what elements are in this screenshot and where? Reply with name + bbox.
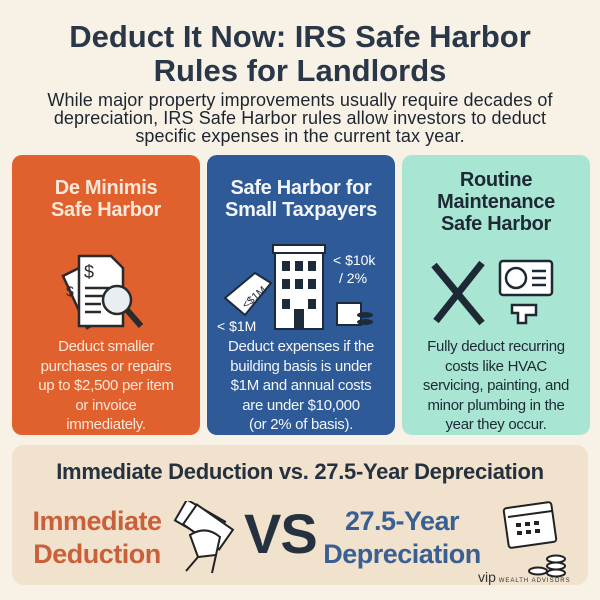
icon: documents with magnifier: $ bbox=[66, 283, 74, 299]
title: Deduct It Now: IRS Safe Harbor bbox=[69, 19, 531, 54]
text: routine maintenance: Fully deduct recurring bbox=[427, 338, 565, 355]
icon: documents with magnifier bbox=[61, 254, 144, 330]
label: immediate deduction: Deduction bbox=[33, 539, 161, 569]
icon: building with tag: <$1M bbox=[240, 284, 269, 311]
text: small taxpayers: are under $10,000 bbox=[242, 396, 360, 414]
text: de minimis bbox=[38, 338, 174, 433]
heading: small taxpayers: Safe Harbor for bbox=[230, 177, 372, 199]
text: de minimis: Deduct smaller bbox=[58, 338, 154, 355]
text: small taxpayers: Deduct expenses if the bbox=[228, 338, 374, 355]
heading: routine maintenance: Maintenance bbox=[437, 191, 555, 213]
panel: de minimis bbox=[12, 155, 200, 435]
heading: routine maintenance: Safe Harbor bbox=[441, 213, 551, 235]
text: small taxpayers: building basis is under bbox=[230, 358, 372, 374]
text: de minimis: purchases or repairs bbox=[41, 358, 171, 374]
icon: tools and HVAC bbox=[431, 260, 554, 326]
icon: building with tag bbox=[217, 244, 376, 334]
heading: small taxpayers: Small Taxpayers bbox=[225, 199, 377, 221]
text: routine maintenance: year they occur. bbox=[445, 416, 547, 433]
panel: routine maintenance bbox=[402, 155, 590, 435]
title: Rules for Landlords bbox=[154, 53, 446, 88]
icon: building with tag: < $10k bbox=[333, 252, 376, 268]
heading: de minimis: De Minimis bbox=[55, 177, 157, 199]
text: routine maintenance: servicing, painting, and bbox=[423, 377, 569, 394]
panel: small taxpayers bbox=[207, 155, 395, 435]
panel: comparison bbox=[12, 445, 588, 585]
subtitle: While major property improvements usually require decades of bbox=[47, 90, 553, 110]
icon: calendar with coins bbox=[502, 501, 566, 578]
subtitle: specific expenses in the current tax year. bbox=[135, 126, 465, 146]
label: immediate deduction bbox=[32, 506, 162, 569]
logo: VIP wealth advisors: vip WEALTH ADVISORS bbox=[478, 569, 571, 585]
text: de minimis: up to $2,500 per item bbox=[38, 377, 174, 394]
label: depreciation bbox=[323, 506, 481, 569]
text: VS: VS bbox=[244, 502, 317, 565]
heading: routine maintenance bbox=[437, 169, 555, 235]
heading: small taxpayers bbox=[225, 177, 377, 221]
heading: de minimis: Safe Harbor bbox=[51, 199, 161, 221]
text: small taxpayers: (or 2% of basis). bbox=[249, 416, 353, 433]
text: routine maintenance: costs like HVAC bbox=[445, 358, 547, 374]
label: depreciation: 27.5-Year bbox=[345, 506, 459, 536]
heading: comparison: Immediate Deduction vs. 27.5-Year Depreciation bbox=[56, 459, 544, 484]
heading: routine maintenance: Routine bbox=[460, 169, 532, 191]
icon: building with tag: < $1M bbox=[217, 318, 256, 334]
icon: hand with cash bbox=[174, 501, 234, 574]
text: routine maintenance bbox=[423, 338, 569, 433]
text: small taxpayers: $1M and annual costs bbox=[231, 377, 371, 394]
title bbox=[69, 19, 531, 88]
text: small taxpayers bbox=[228, 338, 374, 433]
text: de minimis: or invoice bbox=[75, 396, 137, 414]
icon: documents with magnifier: $ bbox=[84, 262, 94, 282]
label: immediate deduction: Immediate bbox=[32, 506, 162, 536]
label: depreciation: Depreciation bbox=[323, 539, 481, 569]
text: de minimis: immediately. bbox=[66, 416, 146, 433]
text: routine maintenance: minor plumbing in the bbox=[427, 396, 565, 414]
subtitle: depreciation, IRS Safe Harbor rules allow investors to deduct bbox=[54, 108, 546, 128]
icon: building with tag: / 2% bbox=[339, 270, 367, 286]
heading: de minimis bbox=[51, 177, 161, 221]
subtitle bbox=[47, 90, 553, 146]
